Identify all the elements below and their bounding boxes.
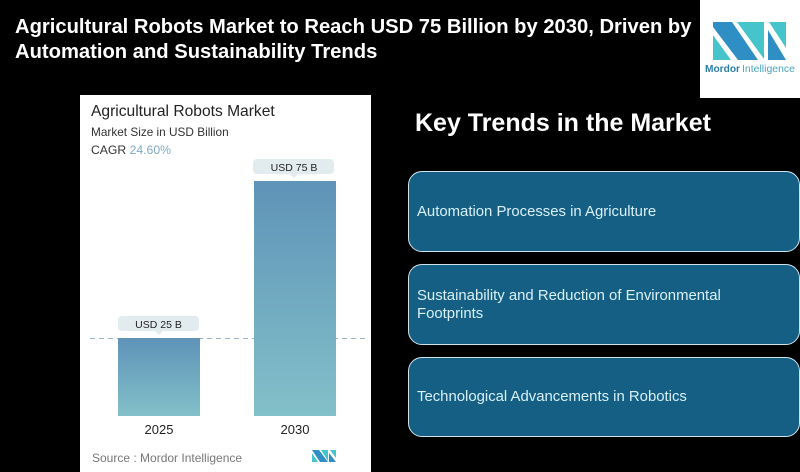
CAGR: CAGR 24.60% [91,143,171,157]
bar chart: 2025 [145,422,173,437]
bar chart: 2030 [281,422,309,437]
title: Automation and Sustainability Trends [15,40,377,62]
bar chart: Source : Mordor Intelligence [92,451,242,465]
trend card: automation: Automation Processes in Agriculture [417,204,656,220]
trend card: sustainability: Footprints [417,306,483,322]
trend card: technology [408,357,800,437]
chart subtitle: Market Size in USD Billion [91,125,229,139]
bar chart: USD 25 B [135,319,182,331]
heading: key trends: Key Trends in the Market [415,109,711,137]
bar chart [90,159,365,465]
panel: market chart [80,95,371,472]
title [15,16,692,62]
chart heading: Agricultural Robots Market [91,103,275,120]
trend card: sustainability: Sustainability and Reduction of Environmental [417,288,721,304]
logo: Mordor Intelligence: Intelligence [742,63,795,75]
bar chart: USD 75 B [271,162,317,174]
title: Agricultural Robots Market to Reach USD 75 Billion by 2030, Driven by [15,16,691,38]
trend card: automation [408,171,800,252]
trend card: sustainability [408,264,800,345]
logo: Mordor Intelligence: Mordor [705,63,740,75]
trend card: technology: Technological Advancements in Robotics [417,389,687,405]
logo: Mordor Intelligence [700,0,800,98]
